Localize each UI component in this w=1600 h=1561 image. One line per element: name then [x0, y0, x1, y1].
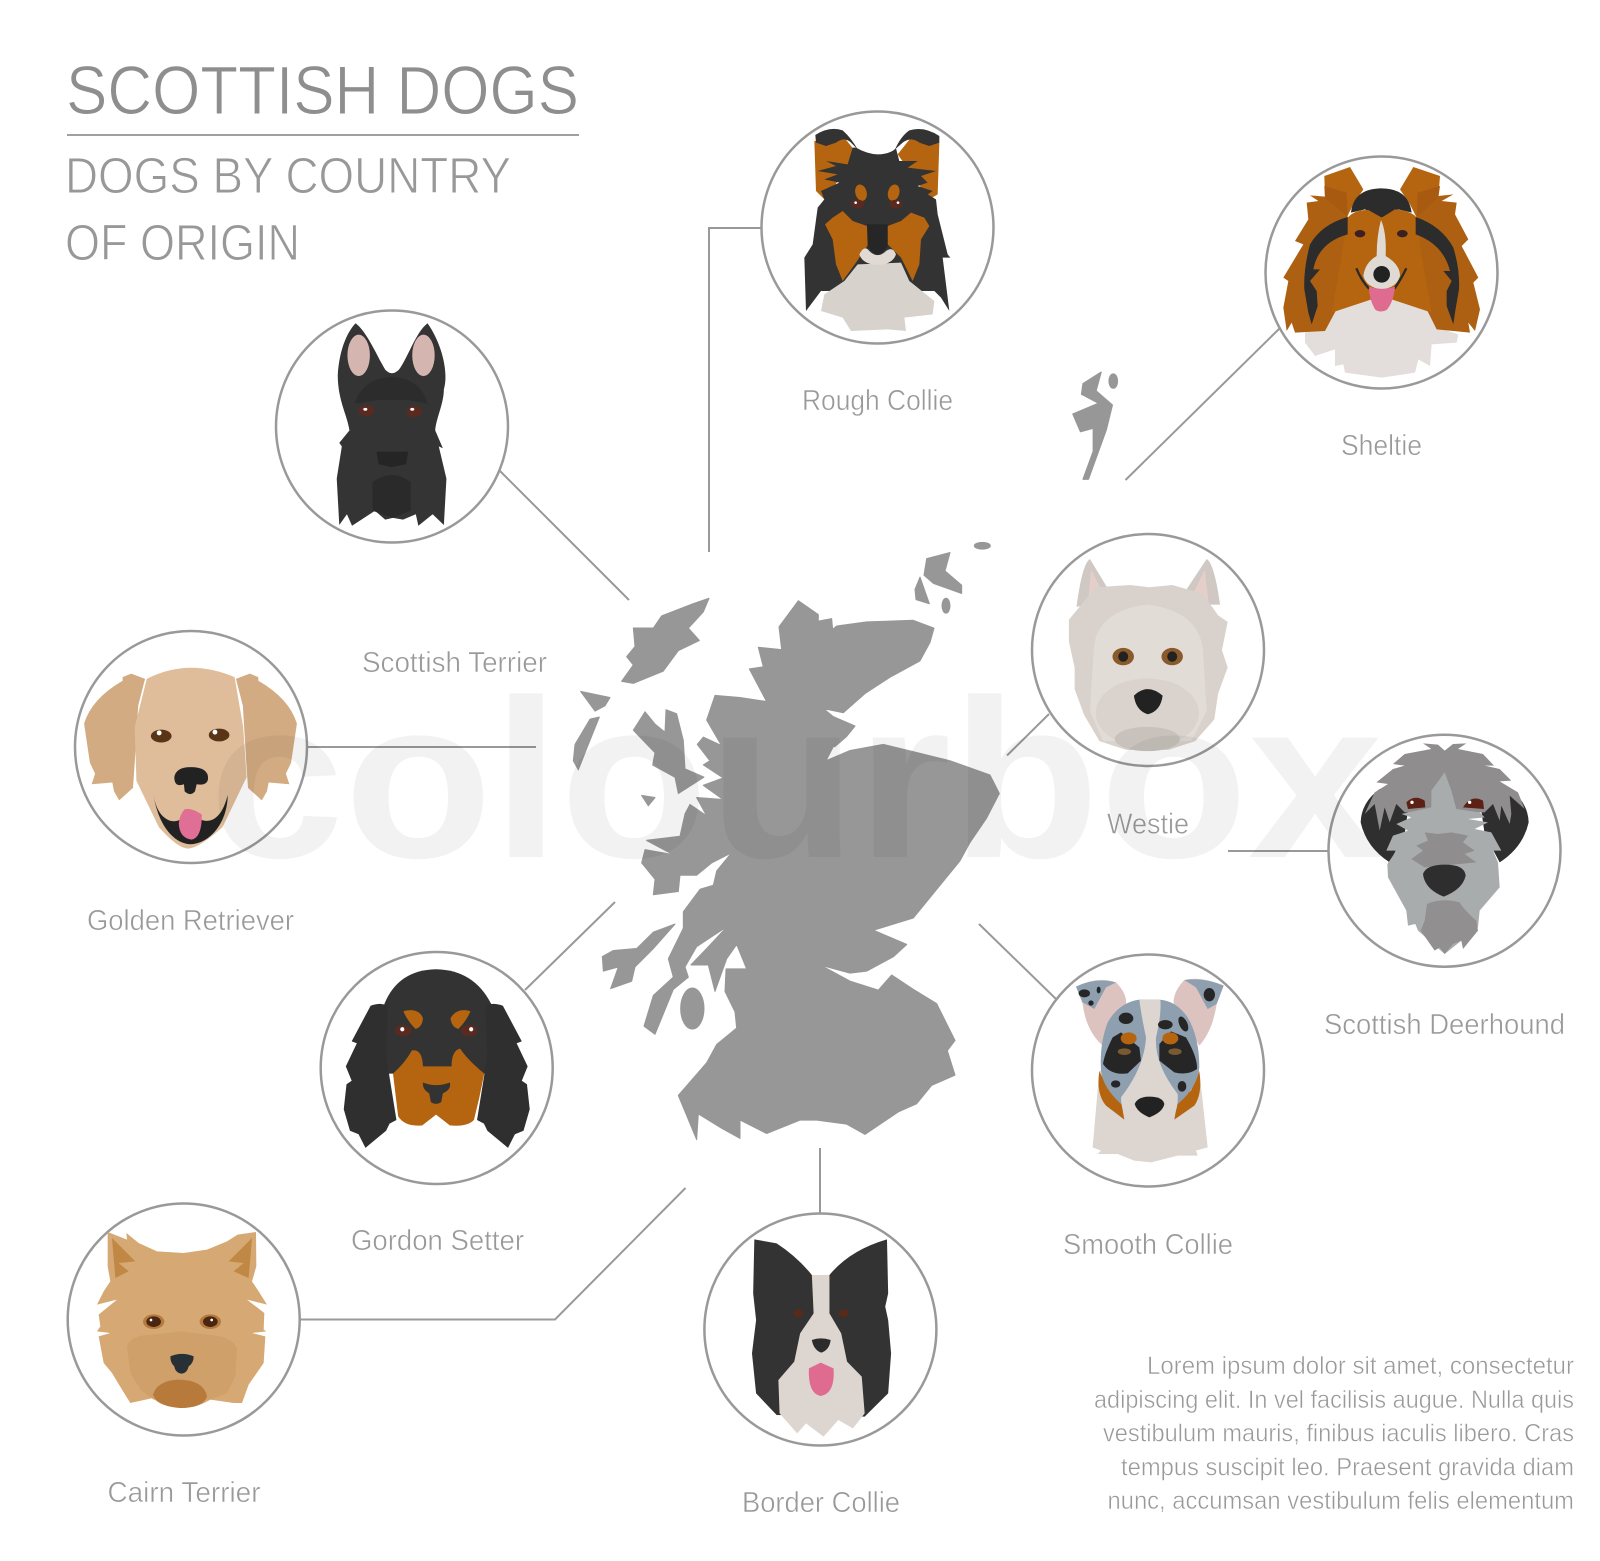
dog: Sheltie	[1266, 156, 1498, 388]
head	[1283, 167, 1480, 378]
dog: Rough Collie	[762, 112, 994, 344]
head	[97, 1232, 267, 1408]
dog: Gordon Setter	[321, 952, 553, 1184]
head	[1069, 559, 1228, 751]
head	[344, 969, 530, 1148]
dog: Cairn Terrier	[68, 1204, 300, 1436]
body text: vestibulum mauris, finibus iaculis libero. Cras	[1103, 1420, 1574, 1448]
dog: Border Collie	[704, 1214, 936, 1446]
label: Westie: Westie	[1107, 808, 1189, 840]
body text	[1094, 1352, 1574, 1515]
label: Gordon Setter: Gordon Setter	[351, 1225, 524, 1257]
head	[84, 668, 297, 849]
portrait ring	[68, 1204, 300, 1436]
head	[1361, 743, 1529, 954]
dog: Westie	[1032, 534, 1264, 766]
portrait ring	[276, 310, 508, 542]
subtitle	[65, 147, 511, 271]
Shetland	[1073, 372, 1117, 479]
subtitle: DOGS BY COUNTRY	[65, 147, 511, 204]
head	[804, 129, 950, 331]
dog: Golden Retriever	[75, 631, 307, 863]
dog: Scottish Deerhound	[1328, 735, 1560, 967]
head	[752, 1239, 891, 1437]
label: Border Collie: Border Collie	[742, 1487, 900, 1519]
body text: nunc, accumsan vestibulum felis elementum	[1108, 1487, 1574, 1515]
portrait ring	[1032, 954, 1264, 1186]
dog: Smooth Collie	[1032, 954, 1264, 1186]
islands	[573, 542, 990, 1029]
title: SCOTTISH DOGS	[66, 52, 579, 129]
label: Golden Retriever: Golden Retriever	[87, 905, 294, 937]
dog: Scottish Terrier	[276, 310, 508, 542]
subtitle: OF ORIGIN	[65, 214, 300, 271]
head	[1076, 979, 1224, 1162]
label: Scottish Terrier: Scottish Terrier	[362, 647, 547, 679]
body text: Lorem ipsum dolor sit amet, consectetur	[1147, 1352, 1574, 1380]
label: Cairn Terrier: Cairn Terrier	[108, 1477, 261, 1509]
portrait ring	[762, 112, 994, 344]
label: Smooth Collie: Smooth Collie	[1063, 1229, 1233, 1261]
portrait ring	[704, 1214, 936, 1446]
label: Sheltie: Sheltie	[1341, 430, 1422, 462]
mainland	[642, 601, 999, 1140]
map of Scotland	[573, 372, 1117, 1140]
portrait ring	[1266, 156, 1498, 388]
portrait ring	[321, 952, 553, 1184]
body text: tempus suscipit leo. Praesent gravida diam	[1121, 1454, 1574, 1482]
portrait ring	[75, 631, 307, 863]
connector lines	[298, 228, 1329, 1320]
portrait ring	[1328, 735, 1560, 967]
label: Scottish Deerhound: Scottish Deerhound	[1324, 1009, 1565, 1041]
portrait ring	[1032, 534, 1264, 766]
head	[337, 323, 446, 526]
watermark: colourbox	[209, 652, 1383, 905]
body text: adipiscing elit. In vel facilisis augue. Nulla quis	[1094, 1386, 1574, 1414]
label: Rough Collie: Rough Collie	[802, 385, 953, 417]
